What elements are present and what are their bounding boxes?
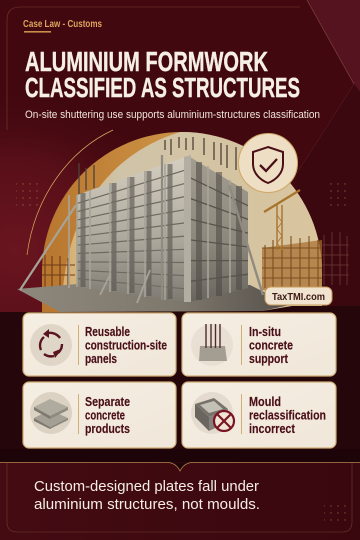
skyline scaffolding [42, 232, 349, 290]
icon: mould with cross [191, 392, 234, 434]
card: reusable panels [23, 313, 176, 376]
tag: case law [23, 18, 102, 33]
footer panel [0, 449, 360, 540]
card: in-situ support: support [249, 352, 289, 366]
ground slab [17, 284, 290, 312]
brand pill: TaxTMI.com [272, 292, 325, 303]
formwork left face [77, 157, 185, 302]
card: reusable panels: construction-site [85, 338, 167, 352]
card: reusable panels: Reusable [85, 325, 130, 339]
card: separate products: concrete [85, 408, 125, 422]
title: ALUMINIUM FORMWORK [25, 46, 268, 77]
card: mould incorrect: reclassification [249, 408, 326, 422]
decorative dots right [326, 179, 350, 209]
card: separate products: products [85, 422, 130, 436]
card: separate products: Separate [85, 395, 130, 409]
corner post [184, 155, 191, 302]
braces [20, 155, 263, 303]
tower crane [264, 190, 300, 250]
title [25, 46, 300, 103]
card: in-situ support: concrete [249, 338, 293, 352]
decorative dots left [16, 179, 38, 209]
brand pill [265, 287, 332, 305]
card: in-situ support: In-situ [249, 325, 281, 339]
card: in-situ support [182, 313, 336, 376]
card: separate products [23, 382, 176, 448]
formwork right face [190, 157, 248, 302]
takeaway text: Custom-designed plates fall under [34, 479, 259, 495]
card: reusable panels: panels [85, 352, 117, 366]
tag: case law: Case Law - Customs [23, 18, 102, 30]
badge: shield check [238, 134, 298, 192]
card: mould incorrect [182, 382, 336, 448]
card grid backdrop [0, 306, 360, 462]
hero illustration [17, 130, 349, 312]
rebar rods [79, 137, 236, 195]
dome backdrop [27, 130, 340, 312]
subtitle: On-site shuttering use supports aluminium-structures classification [25, 109, 320, 121]
card: mould incorrect: Mould [249, 395, 281, 409]
icon: recycle arrows [30, 324, 72, 366]
card: mould incorrect: incorrect [249, 422, 296, 436]
icon: stacked slabs [30, 392, 72, 434]
takeaway text: aluminium structures, not moulds. [34, 497, 260, 513]
icon: concrete with rebar [191, 324, 233, 366]
